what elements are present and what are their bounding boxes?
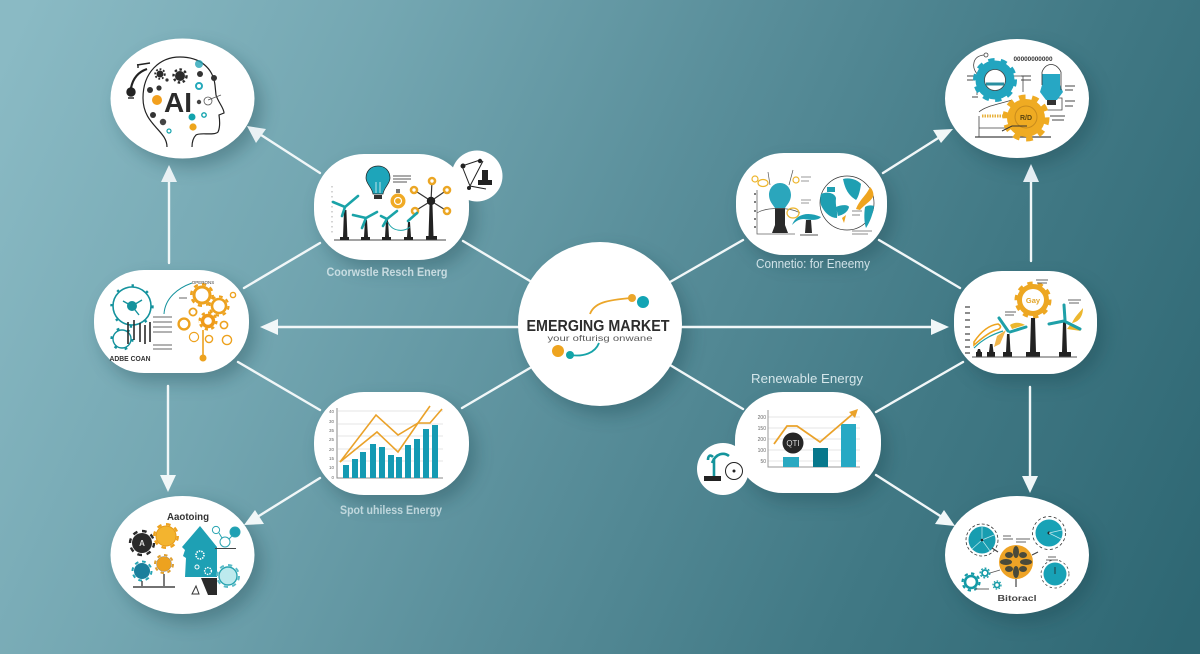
chart: axis labels: 100 (758, 448, 766, 454)
connector: centre to lower-right chart (670, 365, 743, 409)
icon: orange gear tree (179, 284, 236, 361)
chart: axis labels: 150 (758, 426, 766, 432)
icon: orange turbine wheel (992, 545, 1038, 587)
text: node caption: Bitoracl (998, 593, 1036, 603)
icon: brain gears (147, 60, 221, 133)
connector: centre to top-right node (670, 240, 743, 282)
label: top-right node: Connetio: for Eneemy (756, 257, 871, 271)
text tag (1005, 280, 1081, 315)
icon: small teal gears (962, 568, 1001, 590)
subtitle: your ofturisg onwane (548, 333, 653, 343)
chart: badge: QTI (786, 439, 800, 448)
title: EMERGING MARKET (526, 318, 670, 335)
connector: right node to lower-right chart (876, 362, 963, 412)
text lines (852, 211, 872, 234)
arrow: right node down to bottom-right (1022, 387, 1038, 493)
icon: gears: A (139, 539, 145, 548)
connector: centre to lower-left chart (462, 368, 530, 408)
arrow: top-left node to AI (247, 126, 320, 173)
icon: bulb tower (754, 170, 800, 234)
arrow: centre to right node (680, 319, 949, 335)
icon: orange gear (1016, 284, 1050, 316)
chart: axes and grid (768, 410, 860, 467)
icon: upper swoosh (590, 294, 649, 314)
chart: axis labels: 200 (758, 415, 766, 421)
chart: axis labels: 50 (760, 459, 766, 465)
text lines (153, 298, 187, 349)
icon: gears (130, 524, 178, 587)
arrow: left node up to AI (161, 165, 177, 263)
arrow: top-right node to top-right circle (883, 129, 953, 173)
icon: teal gear (975, 60, 1015, 100)
connector: left node to top-left node (244, 243, 320, 288)
icon: piping (967, 53, 1075, 137)
chart: axis labels: 0 (331, 475, 334, 480)
text: AI: AI (164, 87, 192, 118)
node: gears (94, 270, 249, 373)
chart: axis labels: 20 (329, 447, 334, 452)
node: wind turbines and lightbulb (314, 150, 502, 260)
icon: small orange tags (752, 176, 811, 218)
icon: teal gears (112, 283, 192, 350)
icon: orange gear (1002, 97, 1047, 139)
text: header: 00000000000 (1014, 57, 1053, 63)
icon: lower swoosh (552, 343, 599, 359)
chart: axis labels (965, 307, 970, 353)
node: gear over turbines (954, 271, 1097, 374)
text: node caption: Aaotoing (167, 512, 209, 523)
icon: wind turbines (332, 186, 446, 240)
connector: top-right node to right node (879, 240, 960, 288)
node: machinery gears (945, 39, 1089, 158)
arrow: right node up to top-right circle (1023, 164, 1039, 261)
chart: axis labels: 25 (329, 437, 334, 442)
icon: black bars (128, 320, 150, 344)
chart: bars (783, 424, 856, 467)
chart: axes and grid (337, 408, 443, 478)
icon: turbines (972, 305, 1083, 357)
chart: bars (343, 425, 438, 478)
label: top-left node: Coorwstle Resch Energ (326, 267, 448, 279)
text lines (975, 536, 1058, 589)
connectors and arrows (160, 126, 1039, 526)
arrow: left node down to bottom-left (160, 386, 176, 492)
dashed label (982, 114, 1004, 118)
icon: head outline (143, 57, 224, 147)
node: house and gears (110, 496, 254, 614)
chart: axis labels: 40 (329, 409, 334, 414)
arrow: lower-right chart to bottom-right (876, 475, 955, 526)
icon: money bag (390, 189, 406, 208)
icon: connected circles (212, 526, 240, 548)
icon: small network badge (452, 150, 502, 202)
node: turbine discs (945, 496, 1089, 614)
icon: teal house head (182, 526, 217, 595)
label: lower-right chart: Renewable Energy (751, 371, 863, 386)
node: bulb and globe (736, 153, 887, 255)
connector: left node to lower-left chart (238, 362, 320, 410)
chart: axis labels (329, 409, 334, 480)
node: bar and line chart (314, 392, 469, 495)
icon: orange gear: R/D (1020, 115, 1032, 122)
chart: badge (782, 432, 804, 454)
icon: globe (820, 176, 874, 230)
icon: orange gear: Gay (1026, 296, 1041, 305)
icon: teal tank (1040, 64, 1063, 105)
chart: axis labels: 200 (758, 437, 766, 443)
chart: axis labels: 30 (329, 419, 334, 424)
connector: top-left node to centre (463, 241, 530, 281)
arrow: centre to left node (260, 319, 520, 335)
icon: lightbulb (366, 166, 411, 199)
chart: axis labels: 15 (329, 456, 334, 461)
icon: pale gear (217, 565, 239, 587)
chart: axis labels: 10 (329, 465, 334, 470)
chart: trend line (774, 409, 858, 444)
label: lower-left chart: Spot uhiless Energy (340, 505, 443, 517)
text: node caption: ADBE COAN (110, 356, 150, 363)
chart: trend lines (340, 406, 442, 462)
badge: palm and headset (697, 443, 749, 495)
icon: lamp arm (127, 63, 150, 98)
node: AI head (110, 38, 254, 158)
icon: small turbine (792, 214, 821, 235)
chart: axis labels: 35 (329, 428, 334, 433)
arrow: lower-left chart to bottom-left (244, 478, 320, 525)
chart: axis labels (758, 415, 766, 465)
node: renewable chart (735, 392, 881, 493)
icon: network tower (411, 178, 450, 240)
icon: teal discs (966, 516, 1069, 588)
text: gear tag: OPERONS (192, 280, 214, 285)
node: centre circle (518, 242, 682, 406)
